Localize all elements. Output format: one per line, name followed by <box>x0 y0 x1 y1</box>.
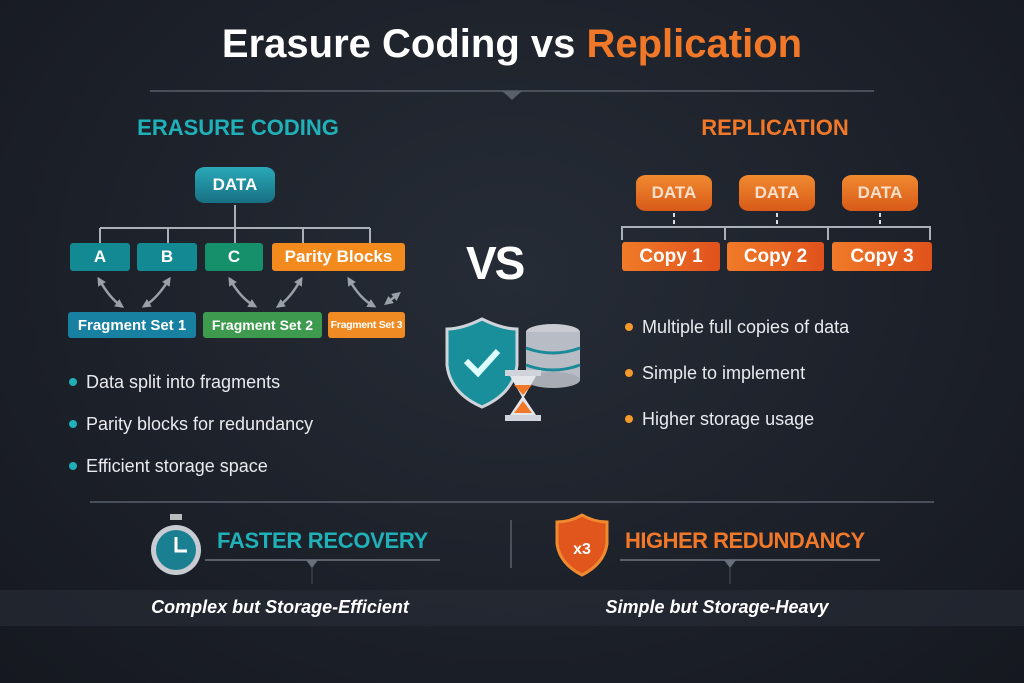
diagram: data split <box>98 205 401 308</box>
icon: stopwatch <box>151 514 201 575</box>
panel: replication: Copy 2 <box>744 246 807 266</box>
panel: erasure coding <box>68 115 405 476</box>
VS: VS <box>466 237 523 289</box>
panel: erasure coding: Fragment Set 3 <box>331 319 402 331</box>
title: Erasure Coding vs Replication <box>222 22 802 66</box>
diagram: copies <box>621 213 931 240</box>
blocks A B C parity: A <box>94 247 106 266</box>
label: FASTER RECOVERY <box>217 528 428 553</box>
feature: higher redundancy <box>556 513 865 577</box>
panel: erasure coding: Parity blocks for redundancy <box>86 414 313 434</box>
bottom band <box>0 590 1024 626</box>
icon: shield x3: x3 <box>573 541 591 558</box>
panel: erasure coding: B <box>161 247 173 266</box>
summary: replication: Simple but Storage-Heavy <box>605 597 829 617</box>
panel: erasure coding: Efficient storage space <box>86 456 268 476</box>
panel: replication: Copy 3 <box>850 246 914 266</box>
panel: replication: DATA <box>858 183 902 202</box>
data cylinder: DATA <box>213 175 257 194</box>
heading: erasure coding: ERASURE CODING <box>137 115 339 140</box>
panel: replication: Higher storage usage <box>642 409 814 429</box>
fragment sets <box>68 312 196 338</box>
data cylinders <box>636 175 712 211</box>
panel: replication <box>621 115 932 429</box>
icon: shield x3 <box>556 513 608 577</box>
label: HIGHER REDUNDANCY <box>625 528 865 553</box>
feature: faster recovery <box>151 514 428 575</box>
summary: erasure: Complex but Storage-Efficient <box>151 597 409 617</box>
copy boxes: Copy 1 <box>639 246 703 266</box>
panel: erasure coding: Parity Blocks <box>285 247 392 266</box>
fragment sets: Fragment Set 1 <box>78 316 186 334</box>
bullets: Data split into fragments <box>86 372 280 392</box>
panel: erasure coding: Fragment Set 2 <box>212 317 313 333</box>
data cylinders: DATA <box>652 183 696 202</box>
heading: replication: REPLICATION <box>701 115 849 140</box>
bottom divider <box>90 501 934 584</box>
blocks A B C parity <box>70 243 130 271</box>
copy boxes <box>622 242 720 271</box>
icon: shield database hourglass <box>446 317 580 421</box>
panel: erasure coding: C <box>228 247 240 266</box>
bullets: Multiple full copies of data <box>642 317 849 337</box>
data cylinder <box>195 167 275 203</box>
panel: replication: Simple to implement <box>642 363 805 383</box>
panel: replication: DATA <box>755 183 799 202</box>
title underline <box>150 90 874 100</box>
